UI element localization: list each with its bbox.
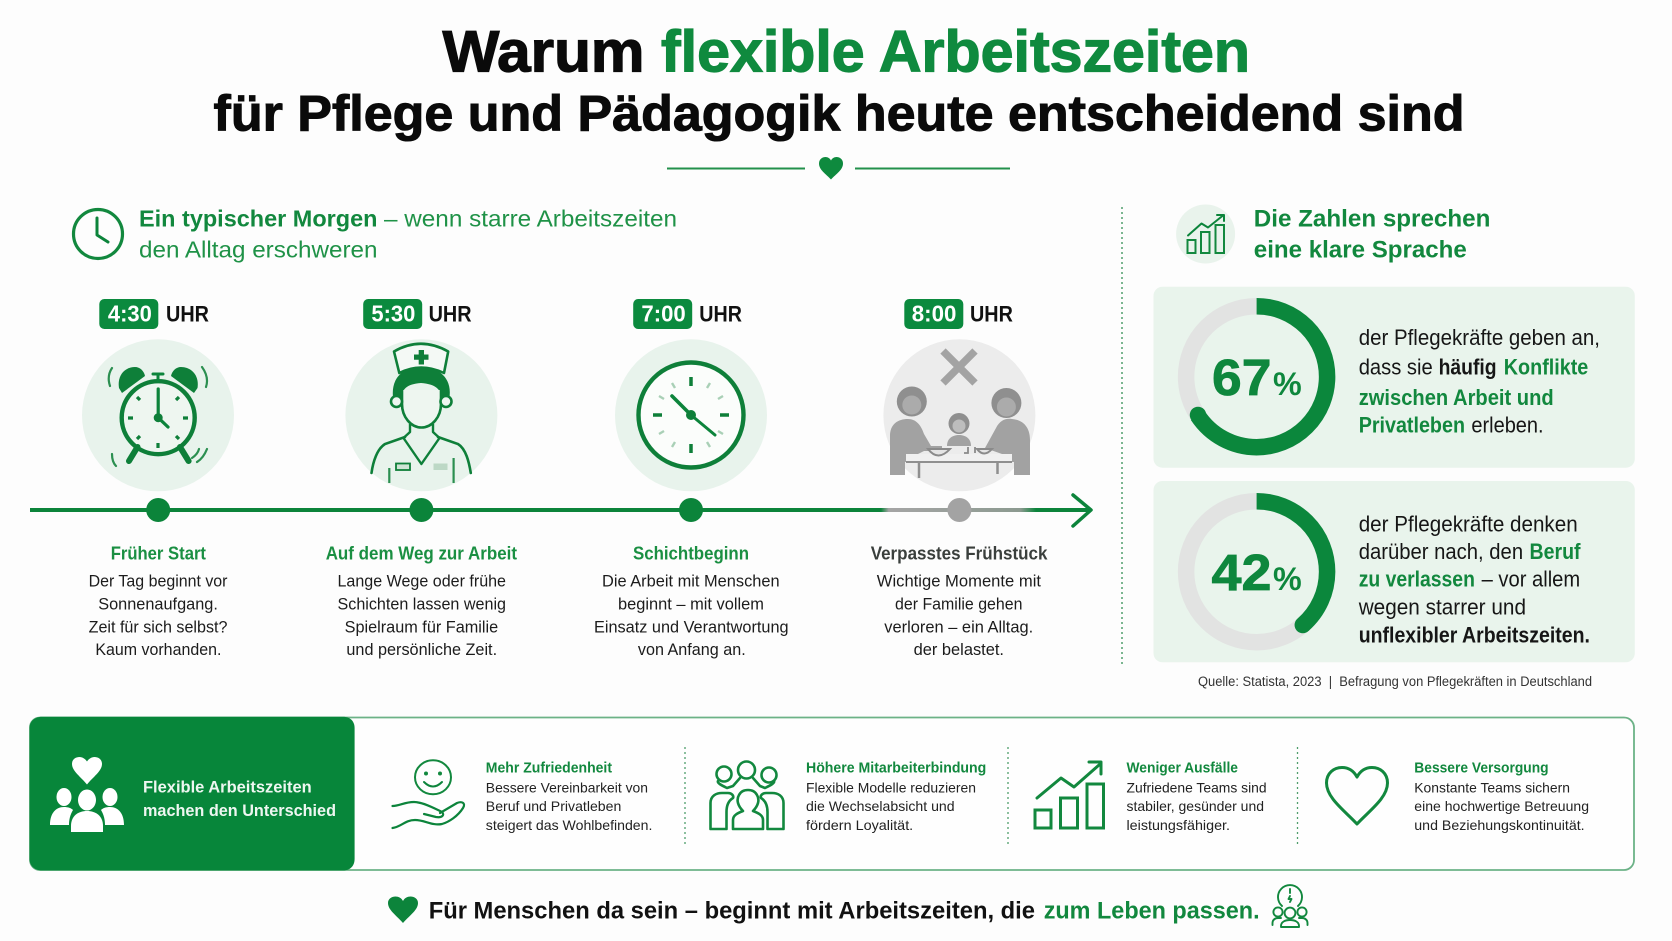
donut chart: 42 percent bbox=[1186, 501, 1327, 642]
donut chart: 42 percent: % bbox=[1273, 561, 1302, 597]
stat description: zwischen Arbeit und bbox=[1359, 385, 1554, 410]
benefit: Weniger Ausfälle bbox=[1035, 761, 1267, 833]
icon: clock and people bbox=[1272, 885, 1308, 927]
title: für Pflege und Pädagogik heute entscheidend sind bbox=[214, 86, 1464, 142]
time badge bbox=[99, 299, 209, 329]
step 3: 7:00 bbox=[594, 299, 789, 659]
benefit text: die Wechselabsicht und bbox=[806, 798, 955, 814]
time badge bbox=[363, 299, 472, 329]
step text: der belastet. bbox=[914, 641, 1004, 659]
benefit: Mehr Zufriedenheit bbox=[392, 760, 652, 833]
heading text: morning: Ein typischer Morgen bbox=[139, 206, 378, 232]
benefit text: stabiler, gesünder und bbox=[1126, 798, 1264, 814]
benefit title: Weniger Ausfälle bbox=[1126, 761, 1238, 777]
step 4: 8:00 bbox=[871, 299, 1048, 659]
time badge: 8:00 bbox=[912, 301, 956, 327]
step text: Wichtige Momente mit bbox=[877, 573, 1041, 591]
title: flexible Arbeitszeiten bbox=[661, 20, 1250, 85]
icon: team bbox=[710, 762, 784, 829]
icon: missed family breakfast bbox=[883, 339, 1035, 491]
step text: und persönliche Zeit. bbox=[346, 641, 497, 659]
icon: growth chart bbox=[1035, 762, 1104, 828]
heading text: morning: – wenn starre Arbeitszeiten bbox=[384, 206, 677, 232]
benefit text bbox=[1126, 780, 1267, 833]
time badge: UHR bbox=[970, 302, 1013, 327]
section heading: numbers bbox=[1176, 204, 1490, 264]
panel: stat 67 percent bbox=[1154, 287, 1635, 468]
step text: beginnt – mit vollem bbox=[618, 595, 764, 613]
step text bbox=[338, 573, 506, 659]
icon: heart and people bbox=[50, 757, 124, 832]
stat description: erleben. bbox=[1471, 413, 1544, 438]
closing line bbox=[388, 885, 1308, 927]
benefits lead block bbox=[30, 717, 355, 870]
icon: nurse bbox=[345, 339, 497, 491]
step text: von Anfang an. bbox=[638, 641, 746, 659]
title: Warum bbox=[442, 20, 644, 85]
stat description: – vor allem bbox=[1482, 567, 1580, 592]
time badge: UHR bbox=[166, 302, 209, 327]
step heading: Auf dem Weg zur Arbeit bbox=[326, 543, 517, 563]
heading text: morning: den Alltag erschweren bbox=[139, 237, 378, 263]
benefit title: Mehr Zufriedenheit bbox=[486, 761, 612, 777]
benefit text bbox=[1414, 780, 1589, 833]
step text: verloren – ein Alltag. bbox=[884, 618, 1033, 636]
benefit text: Zufriedene Teams sind bbox=[1126, 780, 1267, 796]
step heading: Verpasstes Frühstück bbox=[871, 543, 1048, 563]
stat description: häufig bbox=[1439, 354, 1497, 379]
step text: Lange Wege oder frühe bbox=[338, 573, 506, 591]
stat description: unflexibler Arbeitszeiten. bbox=[1359, 623, 1590, 648]
time badge: UHR bbox=[429, 302, 472, 327]
lead text: Flexible Arbeitszeiten bbox=[143, 778, 312, 796]
benefit title: Höhere Mitarbeiterbindung bbox=[806, 761, 986, 777]
title divider with heart bbox=[667, 157, 1010, 180]
stat description: Privatleben bbox=[1359, 413, 1465, 438]
step 1: 4:30 bbox=[82, 299, 234, 659]
icon: alarm clock bbox=[82, 339, 234, 491]
benefit title: Bessere Versorgung bbox=[1414, 761, 1549, 777]
benefit text: Bessere Vereinbarkeit von bbox=[486, 780, 648, 796]
benefit text: eine hochwertige Betreuung bbox=[1414, 798, 1589, 814]
benefit text: steigert das Wohlbefinden. bbox=[486, 817, 652, 833]
closing text: zum Leben passen. bbox=[1044, 897, 1260, 924]
stat description: Konflikte bbox=[1504, 354, 1588, 379]
stat description: Beruf bbox=[1530, 539, 1581, 564]
step 2: 5:30 bbox=[326, 299, 517, 659]
step text bbox=[877, 573, 1041, 659]
benefit text: leistungsfähiger. bbox=[1126, 817, 1230, 833]
donut chart: 67 percent: 67 bbox=[1212, 349, 1271, 406]
step text: Zeit für sich selbst? bbox=[89, 618, 227, 636]
source note: Quelle: Statista, 2023 | Befragung von Pflegekräften in Deutschland bbox=[1198, 674, 1592, 689]
stat description bbox=[1358, 512, 1590, 648]
time badge bbox=[633, 299, 742, 329]
time badge bbox=[904, 299, 1013, 329]
step text: Einsatz und Verantwortung bbox=[594, 618, 789, 636]
benefit text: fördern Loyalität. bbox=[806, 817, 913, 833]
lead text: machen den Unterschied bbox=[143, 802, 336, 820]
step text: Spielraum für Familie bbox=[345, 618, 498, 636]
benefit text: Konstante Teams sichern bbox=[1414, 780, 1570, 796]
time badge: 7:00 bbox=[641, 301, 686, 327]
benefit text: Beruf und Privatleben bbox=[486, 798, 621, 814]
icon: wall clock bbox=[615, 339, 767, 491]
panel: stat 42 percent bbox=[1154, 481, 1635, 662]
icon: clock bbox=[74, 210, 122, 258]
donut chart: 42 percent: 42 bbox=[1212, 544, 1272, 601]
section heading: numbers: eine klare Sprache bbox=[1254, 237, 1467, 264]
stat description: der Pflegekräfte denken bbox=[1359, 512, 1578, 537]
donut chart: 67 percent: % bbox=[1273, 366, 1302, 402]
benefit text bbox=[806, 780, 976, 833]
section heading: morning bbox=[74, 206, 677, 263]
icon: heart outline bbox=[1326, 768, 1388, 824]
step text bbox=[594, 573, 789, 659]
benefit text bbox=[486, 780, 652, 833]
title bbox=[214, 20, 1464, 142]
benefit: Höhere Mitarbeiterbindung bbox=[710, 761, 986, 833]
time badge: UHR bbox=[699, 302, 742, 327]
panel: benefits bbox=[30, 717, 1634, 870]
step heading: Früher Start bbox=[111, 543, 206, 563]
time badge: 5:30 bbox=[371, 301, 415, 327]
stat description: zu verlassen bbox=[1359, 567, 1475, 592]
icon: rising bar chart bbox=[1176, 204, 1235, 264]
step heading: Schichtbeginn bbox=[633, 543, 749, 563]
step text: Der Tag beginnt vor bbox=[89, 573, 228, 591]
step text: Sonnenaufgang. bbox=[98, 595, 218, 613]
heading text: morning bbox=[139, 206, 677, 263]
step text bbox=[89, 573, 228, 659]
step text: Schichten lassen wenig bbox=[338, 595, 506, 613]
stat description: dass sie bbox=[1359, 354, 1433, 379]
benefit text: und Beziehungskontinuität. bbox=[1414, 817, 1585, 833]
stat description: darüber nach, den bbox=[1359, 539, 1523, 564]
step text: Kaum vorhanden. bbox=[95, 641, 221, 659]
donut chart: 67 percent bbox=[1186, 306, 1327, 447]
timeline bbox=[30, 495, 1091, 526]
lead text bbox=[143, 778, 336, 820]
stat description bbox=[1359, 325, 1600, 438]
timeline dots bbox=[146, 498, 971, 522]
stat description: wegen starrer und bbox=[1358, 594, 1526, 619]
stat description: der Pflegekräfte geben an, bbox=[1359, 325, 1600, 350]
icon: heart bbox=[388, 896, 418, 923]
benefit: Bessere Versorgung bbox=[1326, 761, 1589, 833]
icon: smiley over hand bbox=[392, 760, 464, 828]
benefit text: Flexible Modelle reduzieren bbox=[806, 780, 976, 796]
step text: der Familie gehen bbox=[895, 595, 1022, 613]
time badge: 4:30 bbox=[108, 301, 152, 327]
step text: Die Arbeit mit Menschen bbox=[602, 573, 780, 591]
heading text: numbers: Die Zahlen sprechen bbox=[1254, 206, 1490, 233]
timeline line and arrow bbox=[30, 495, 1091, 526]
closing text: Für Menschen da sein – beginnt mit Arbeitszeiten, die bbox=[429, 897, 1035, 924]
